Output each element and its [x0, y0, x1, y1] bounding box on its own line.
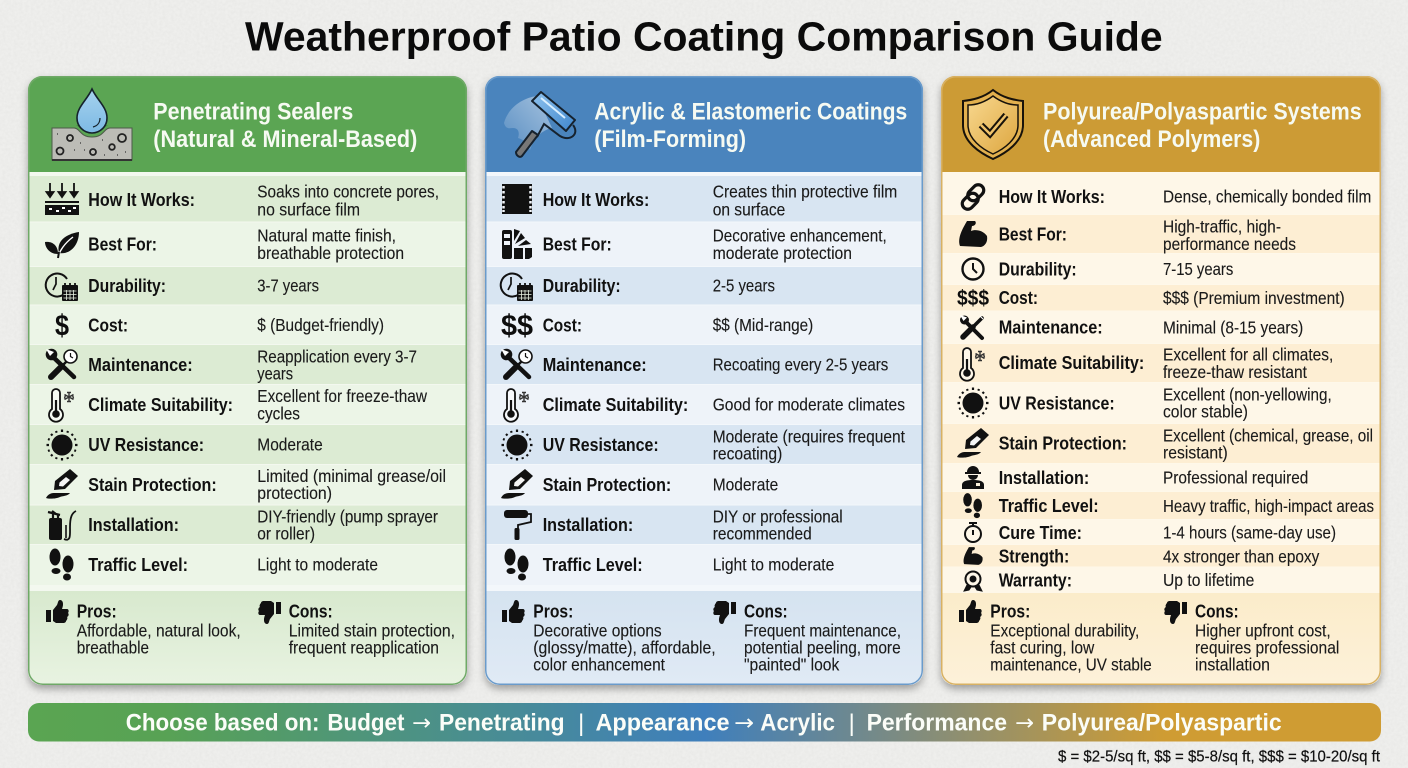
- row: durability: [30, 267, 466, 304]
- value: Moderate: [257, 435, 323, 455]
- icon: pump sprayer: [48, 511, 76, 540]
- row: maintenance: [486, 345, 922, 384]
- value: resistant): [1163, 442, 1228, 462]
- row: stain protection: [30, 465, 466, 504]
- row: maintenance: [942, 311, 1380, 343]
- icon: spilled tube: [46, 469, 78, 499]
- icon: footprints: [504, 548, 528, 580]
- icon: clock and calendar: [46, 274, 78, 301]
- value: Light to moderate: [713, 555, 834, 575]
- row: durability: [942, 254, 1380, 284]
- label: Best For:: [88, 234, 157, 255]
- icon: thumbs up: [502, 600, 525, 623]
- label: Cost:: [88, 315, 128, 336]
- label: How It Works:: [88, 189, 195, 210]
- label: Maintenance:: [543, 354, 647, 375]
- decision banner: Performance: [867, 710, 1007, 737]
- label: Stain Protection:: [543, 474, 671, 495]
- value: High-traffic, high-: [1163, 216, 1281, 236]
- value: recoating): [713, 443, 782, 463]
- value: 1-4 hours (same-day use): [1163, 522, 1336, 542]
- icon: chain link: [960, 183, 986, 211]
- heading: polyurea: (Advanced Polymers): [1043, 126, 1260, 153]
- panel: penetrating sealers: [28, 76, 467, 685]
- value: [1163, 345, 1333, 382]
- value: years: [257, 363, 293, 383]
- icon: thermometer and snowflake: [49, 389, 74, 422]
- value: Moderate: [713, 475, 778, 495]
- row: stain protection: [486, 465, 922, 504]
- pros: Pros:: [533, 600, 573, 621]
- value: [1163, 385, 1332, 422]
- pros: [77, 600, 241, 658]
- value: Good for moderate climates: [713, 395, 905, 415]
- row: traffic level: [30, 545, 466, 585]
- icon: sun: [958, 388, 988, 418]
- decision banner: Penetrating: [439, 710, 565, 737]
- label: Climate Suitability:: [543, 394, 688, 415]
- value: [713, 182, 897, 220]
- value: or roller): [257, 524, 315, 544]
- label: Cure Time:: [999, 522, 1082, 543]
- heading: acrylic: [594, 98, 907, 153]
- label: UV Resistance:: [543, 434, 659, 455]
- decision banner: Polyurea/Polyaspartic: [1042, 710, 1282, 737]
- label: Best For:: [543, 234, 612, 255]
- pros: [990, 600, 1152, 675]
- value: cycles: [257, 403, 300, 423]
- value: [257, 386, 427, 423]
- label: Stain Protection:: [999, 432, 1127, 453]
- decision banner: |: [848, 710, 855, 737]
- row: installation: [942, 464, 1380, 492]
- value: [713, 507, 843, 544]
- value: breathable protection: [257, 243, 404, 263]
- label: Traffic Level:: [999, 495, 1099, 516]
- row: installation: [30, 506, 466, 544]
- value: [713, 426, 905, 463]
- icon: shield with check: [963, 90, 1023, 159]
- panel: polyurea and polyaspartic systems: [941, 76, 1381, 685]
- label: Maintenance:: [88, 354, 193, 375]
- label: Durability:: [543, 275, 621, 296]
- label: Maintenance:: [999, 316, 1103, 337]
- heading: acrylic: (Film-Forming): [594, 126, 746, 153]
- pros: Exceptional durability,: [990, 621, 1139, 641]
- icon: clock and calendar: [501, 274, 533, 301]
- label: Installation:: [543, 514, 633, 535]
- icon: thermometer and snowflake: [960, 348, 984, 381]
- value: DIY or professional: [713, 507, 843, 527]
- icon: two dollar signs: $$: [501, 310, 533, 342]
- row: best for: [30, 222, 466, 266]
- value: Natural matte finish,: [257, 225, 396, 245]
- icon: dollar sign: $: [55, 310, 69, 342]
- label: Stain Protection:: [88, 474, 217, 495]
- value: protection): [257, 483, 332, 503]
- label: Durability:: [999, 259, 1077, 280]
- value: [1163, 216, 1296, 254]
- value: 7-15 years: [1163, 259, 1234, 279]
- value: recommended: [713, 524, 812, 544]
- value: [257, 225, 404, 263]
- icon: award rosette: [964, 572, 982, 591]
- label: Climate Suitability:: [999, 352, 1144, 373]
- title: Weatherproof Patio Coating Comparison Guide: [245, 14, 1163, 60]
- value: [257, 182, 439, 220]
- value: Excellent for all climates,: [1163, 345, 1333, 365]
- heading: polyurea: Polyurea/Polyaspartic Systems: [1043, 98, 1362, 126]
- pros and cons: penetrating: [29, 591, 466, 684]
- cons: [744, 600, 901, 675]
- row: cost: [30, 306, 466, 344]
- decision banner: →: [734, 711, 754, 736]
- pros: maintenance, UV stable: [990, 655, 1152, 675]
- cons: potential peeling, more: [744, 638, 901, 658]
- value: $$$ (Premium investment): [1163, 288, 1345, 308]
- value: no surface film: [257, 200, 360, 220]
- row: cost: [486, 306, 922, 344]
- value: Minimal (8-15 years): [1163, 317, 1303, 337]
- value: Professional required: [1163, 468, 1308, 488]
- icon: footprints: [963, 493, 982, 518]
- icon: small flexed arm: [964, 547, 983, 565]
- value: $ (Budget-friendly): [257, 315, 384, 335]
- label: Traffic Level:: [88, 554, 188, 575]
- row: installation: [486, 506, 922, 544]
- pros and cons: acrylic: [486, 591, 922, 684]
- row: climate suitability: [942, 344, 1380, 382]
- icon: colour swatches: [502, 229, 532, 259]
- pros: [533, 600, 716, 675]
- cons: Cons:: [1195, 600, 1239, 621]
- label: Best For:: [999, 224, 1067, 245]
- value: freeze-thaw resistant: [1163, 362, 1307, 382]
- icon: paint roller: [504, 92, 575, 157]
- panel header: acrylic: [485, 76, 923, 172]
- panel: acrylic and elastomeric coatings: [485, 76, 923, 685]
- cons: Limited stain protection,: [289, 621, 455, 641]
- row: durability: [486, 267, 922, 304]
- heading: penetrating sealers: [153, 98, 417, 153]
- value: Excellent (non-yellowing,: [1163, 385, 1332, 405]
- decision banner: Budget: [327, 710, 404, 737]
- icon: thermometer and snowflake: [504, 389, 528, 422]
- row: maintenance: [30, 345, 466, 384]
- value: 3-7 years: [257, 276, 319, 296]
- value: [257, 466, 446, 503]
- row: climate suitability: [486, 385, 922, 424]
- icon: water drop on porous concrete: [52, 89, 132, 160]
- value: Limited (minimal grease/oil: [257, 466, 446, 486]
- panel header: polyurea: [941, 76, 1381, 172]
- row: stain protection: [942, 424, 1380, 463]
- label: How It Works:: [543, 189, 649, 210]
- cons: installation: [1195, 655, 1270, 675]
- value: DIY-friendly (pump sprayer: [257, 507, 438, 527]
- value: Excellent (chemical, grease, oil: [1163, 425, 1373, 445]
- icon: spilled tube: [501, 469, 533, 499]
- row: traffic level: [486, 545, 922, 585]
- icon: thumbs down: [258, 601, 281, 624]
- value: [257, 507, 438, 544]
- heading: acrylic: Acrylic & Elastomeric Coatings: [594, 98, 907, 126]
- value: Reapplication every 3-7: [257, 346, 417, 366]
- icon: thumbs down: [1164, 601, 1187, 624]
- value: [257, 346, 417, 383]
- label: Traffic Level:: [543, 554, 643, 575]
- icon: professional worker: [962, 466, 984, 489]
- pros: Pros:: [77, 600, 117, 621]
- value: moderate protection: [713, 243, 852, 263]
- value: Creates thin protective film: [713, 182, 897, 202]
- value: Dense, chemically bonded film: [1163, 187, 1371, 207]
- decision banner: →: [1015, 711, 1034, 736]
- icon: sun: [502, 430, 532, 460]
- icon: thumbs up: [46, 600, 69, 623]
- row: cure time: [942, 520, 1380, 544]
- label: Installation:: [88, 514, 179, 535]
- pros: breathable: [77, 638, 149, 658]
- label: Warranty:: [999, 570, 1072, 591]
- decision banner: |: [578, 710, 584, 737]
- icon: sun: [46, 430, 78, 460]
- label: How It Works:: [999, 186, 1105, 207]
- pros: Decorative options: [533, 621, 662, 641]
- cons: frequent reapplication: [289, 638, 439, 658]
- cons: "painted" look: [744, 655, 840, 675]
- icon: roller: [504, 510, 531, 540]
- value: Heavy traffic, high-impact areas: [1163, 496, 1374, 516]
- value: Up to lifetime: [1163, 570, 1254, 590]
- row: uv resistance: [942, 383, 1380, 423]
- cons: Cons:: [744, 600, 788, 621]
- row: strength: [942, 545, 1380, 567]
- label: Cost:: [999, 287, 1038, 308]
- pros and cons: polyurea: [942, 593, 1380, 684]
- value: Excellent for freeze-thaw: [257, 386, 427, 406]
- icon: tools and clock: [501, 349, 532, 377]
- cons: [1195, 600, 1339, 675]
- label: UV Resistance:: [999, 392, 1115, 413]
- label: Strength:: [999, 546, 1069, 567]
- icon: stopwatch: [965, 523, 981, 542]
- value: [713, 225, 887, 263]
- pros: Affordable, natural look,: [77, 621, 241, 641]
- pros: (glossy/matte), affordable,: [533, 638, 716, 658]
- heading: penetrating sealers: (Natural & Mineral-Based): [153, 126, 417, 153]
- value: performance needs: [1163, 234, 1296, 254]
- row: climate suitability: [30, 385, 466, 424]
- row: warranty: [942, 567, 1380, 593]
- decision banner: Acrylic: [760, 710, 835, 737]
- icon: leaf: [45, 232, 79, 258]
- icon: flexed arm: [959, 221, 987, 247]
- row: best for: [486, 222, 922, 266]
- pros: Pros:: [990, 600, 1030, 621]
- icon: spilled tube: [957, 428, 989, 458]
- cons: [289, 600, 455, 658]
- row: cost: [942, 285, 1380, 310]
- row: best for: [942, 215, 1380, 254]
- cons: Cons:: [289, 600, 333, 621]
- value: Decorative enhancement,: [713, 225, 887, 245]
- icon: film strip: [502, 184, 532, 214]
- value: $$ (Mid-range): [713, 315, 813, 335]
- decision banner: [28, 703, 1381, 742]
- heading: polyurea: [1043, 98, 1362, 153]
- decision banner: →: [412, 711, 431, 736]
- row: traffic level: [942, 492, 1380, 519]
- panel header: penetrating sealers: [28, 76, 467, 172]
- value: Moderate (requires frequent: [713, 426, 905, 446]
- value: 4x stronger than epoxy: [1163, 546, 1320, 566]
- icon: three dollar signs: $$$: [957, 287, 989, 310]
- icon: thumbs down: [713, 601, 736, 624]
- row: how it works: [30, 176, 466, 222]
- row: uv resistance: [30, 425, 466, 464]
- row: uv resistance: [486, 425, 922, 464]
- value: Recoating every 2-5 years: [713, 355, 889, 375]
- value: [1163, 425, 1373, 462]
- icon: penetration layers: [45, 183, 79, 215]
- decision banner: Choose based on:: [126, 710, 320, 737]
- icon: tools and clock: [46, 349, 77, 377]
- label: Cost:: [543, 315, 582, 336]
- value: Soaks into concrete pores,: [257, 182, 439, 202]
- row: how it works: [486, 176, 922, 222]
- icon: crossed tools: [960, 315, 983, 338]
- label: Installation:: [999, 467, 1089, 488]
- label: Climate Suitability:: [88, 394, 233, 415]
- cons: Higher upfront cost,: [1195, 621, 1331, 641]
- pros: fast curing, low: [990, 638, 1095, 658]
- cons: Frequent maintenance,: [744, 621, 901, 641]
- cons: requires professional: [1195, 638, 1339, 658]
- label: Durability:: [88, 275, 166, 296]
- cost legend footnote: $ = $2-5/sq ft, $$ = $5-8/sq ft, $$$ = $10-20/sq ft: [1058, 749, 1381, 766]
- heading: penetrating sealers: Penetrating Sealers: [153, 98, 353, 126]
- pros: color enhancement: [533, 655, 665, 675]
- icon: footprints: [50, 548, 74, 580]
- row: how it works: [942, 172, 1380, 214]
- decision banner: Appearance: [596, 710, 730, 737]
- icon: thumbs up: [959, 600, 982, 623]
- value: on surface: [713, 200, 785, 220]
- label: UV Resistance:: [88, 434, 204, 455]
- value: color stable): [1163, 402, 1248, 422]
- value: 2-5 years: [713, 276, 775, 296]
- icon: clock: [962, 258, 984, 280]
- value: Light to moderate: [257, 555, 378, 575]
